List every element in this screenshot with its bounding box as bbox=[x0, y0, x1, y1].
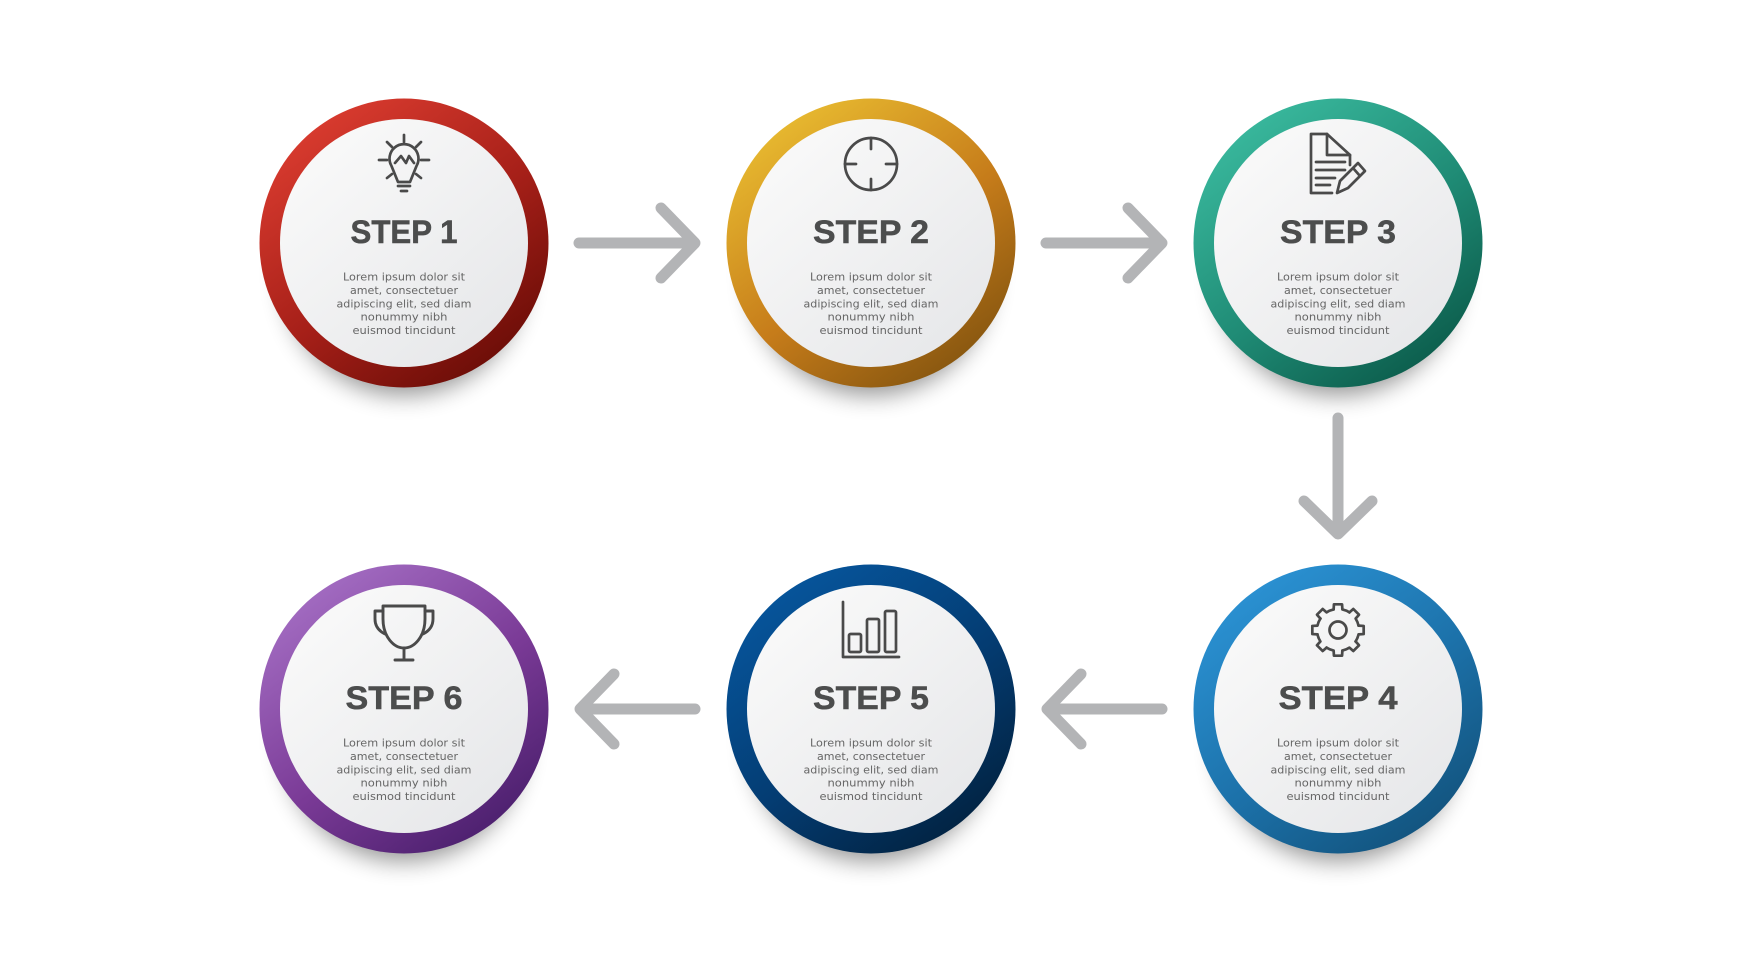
step 3 bbox=[1194, 98, 1482, 395]
circle: amber ring bbox=[726, 98, 1016, 395]
circle: navy ring bbox=[726, 564, 1016, 861]
circle: teal ring bbox=[1194, 98, 1482, 395]
body text: adipiscing elit, sed diam bbox=[336, 298, 472, 310]
icon: gear bbox=[1312, 604, 1364, 656]
body text bbox=[1270, 736, 1406, 803]
arrow: step 1 to step 2 bbox=[579, 208, 695, 278]
body text: amet, consectetuer bbox=[1284, 284, 1392, 297]
body text: euismod tincidunt bbox=[1286, 324, 1390, 337]
step 5 bbox=[726, 564, 1016, 861]
body text: Lorem ipsum dolor sit bbox=[810, 270, 933, 284]
arrow: step 2 to step 3 bbox=[1046, 208, 1162, 278]
step 6 bbox=[260, 564, 548, 861]
body text: euismod tincidunt bbox=[352, 324, 456, 337]
arrow: step 5 to step 6 bbox=[580, 674, 695, 744]
circle: blue ring bbox=[1194, 564, 1482, 861]
heading: STEP 1 bbox=[350, 214, 458, 250]
circle: purple ring bbox=[260, 564, 548, 861]
body text: nonummy nibh bbox=[360, 776, 448, 790]
body text: amet, consectetuer bbox=[350, 750, 458, 763]
circle: red ring bbox=[260, 98, 548, 395]
heading: STEP 5 bbox=[813, 680, 929, 716]
step 2 bbox=[726, 98, 1016, 395]
heading: STEP 3 bbox=[1280, 214, 1396, 250]
body text: Lorem ipsum dolor sit bbox=[343, 270, 466, 284]
body text: Lorem ipsum dolor sit bbox=[810, 736, 933, 750]
arrow: step 3 to step 4 bbox=[1304, 418, 1372, 534]
body text bbox=[804, 736, 938, 803]
heading: STEP 2 bbox=[813, 214, 929, 250]
body text: adipiscing elit, sed diam bbox=[804, 298, 938, 310]
body text: nonummy nibh bbox=[1294, 776, 1382, 790]
icon: document and pencil bbox=[1311, 134, 1365, 193]
body text: euismod tincidunt bbox=[352, 790, 456, 803]
body text: amet, consectetuer bbox=[350, 284, 458, 297]
body text: nonummy nibh bbox=[360, 310, 448, 324]
arrow: step 4 to step 5 bbox=[1047, 674, 1162, 744]
icon: bar chart bbox=[843, 602, 899, 657]
body text: adipiscing elit, sed diam bbox=[1270, 298, 1406, 310]
heading: STEP 4 bbox=[1278, 680, 1398, 716]
body text: Lorem ipsum dolor sit bbox=[1277, 270, 1400, 284]
icon: trophy bbox=[375, 606, 433, 660]
body text: nonummy nibh bbox=[1294, 310, 1382, 324]
icon: light bulb bbox=[379, 135, 429, 191]
body text: euismod tincidunt bbox=[1286, 790, 1390, 803]
body text: amet, consectetuer bbox=[817, 284, 925, 297]
body text bbox=[336, 736, 472, 803]
body text: amet, consectetuer bbox=[817, 750, 925, 763]
body text bbox=[336, 270, 472, 337]
body text: adipiscing elit, sed diam bbox=[804, 764, 938, 776]
body text: nonummy nibh bbox=[828, 776, 915, 790]
step 1 bbox=[260, 98, 548, 395]
body text bbox=[1270, 270, 1406, 337]
body text: euismod tincidunt bbox=[820, 324, 923, 337]
icon: crosshair target bbox=[845, 138, 897, 190]
body text: euismod tincidunt bbox=[820, 790, 923, 803]
heading: STEP 6 bbox=[345, 680, 463, 716]
body text: Lorem ipsum dolor sit bbox=[1277, 736, 1400, 750]
body text: nonummy nibh bbox=[828, 310, 915, 324]
body text: amet, consectetuer bbox=[1284, 750, 1392, 763]
body text bbox=[804, 270, 938, 337]
body text: adipiscing elit, sed diam bbox=[336, 764, 472, 776]
step 4 bbox=[1194, 564, 1482, 861]
body text: Lorem ipsum dolor sit bbox=[343, 736, 466, 750]
body text: adipiscing elit, sed diam bbox=[1270, 764, 1406, 776]
